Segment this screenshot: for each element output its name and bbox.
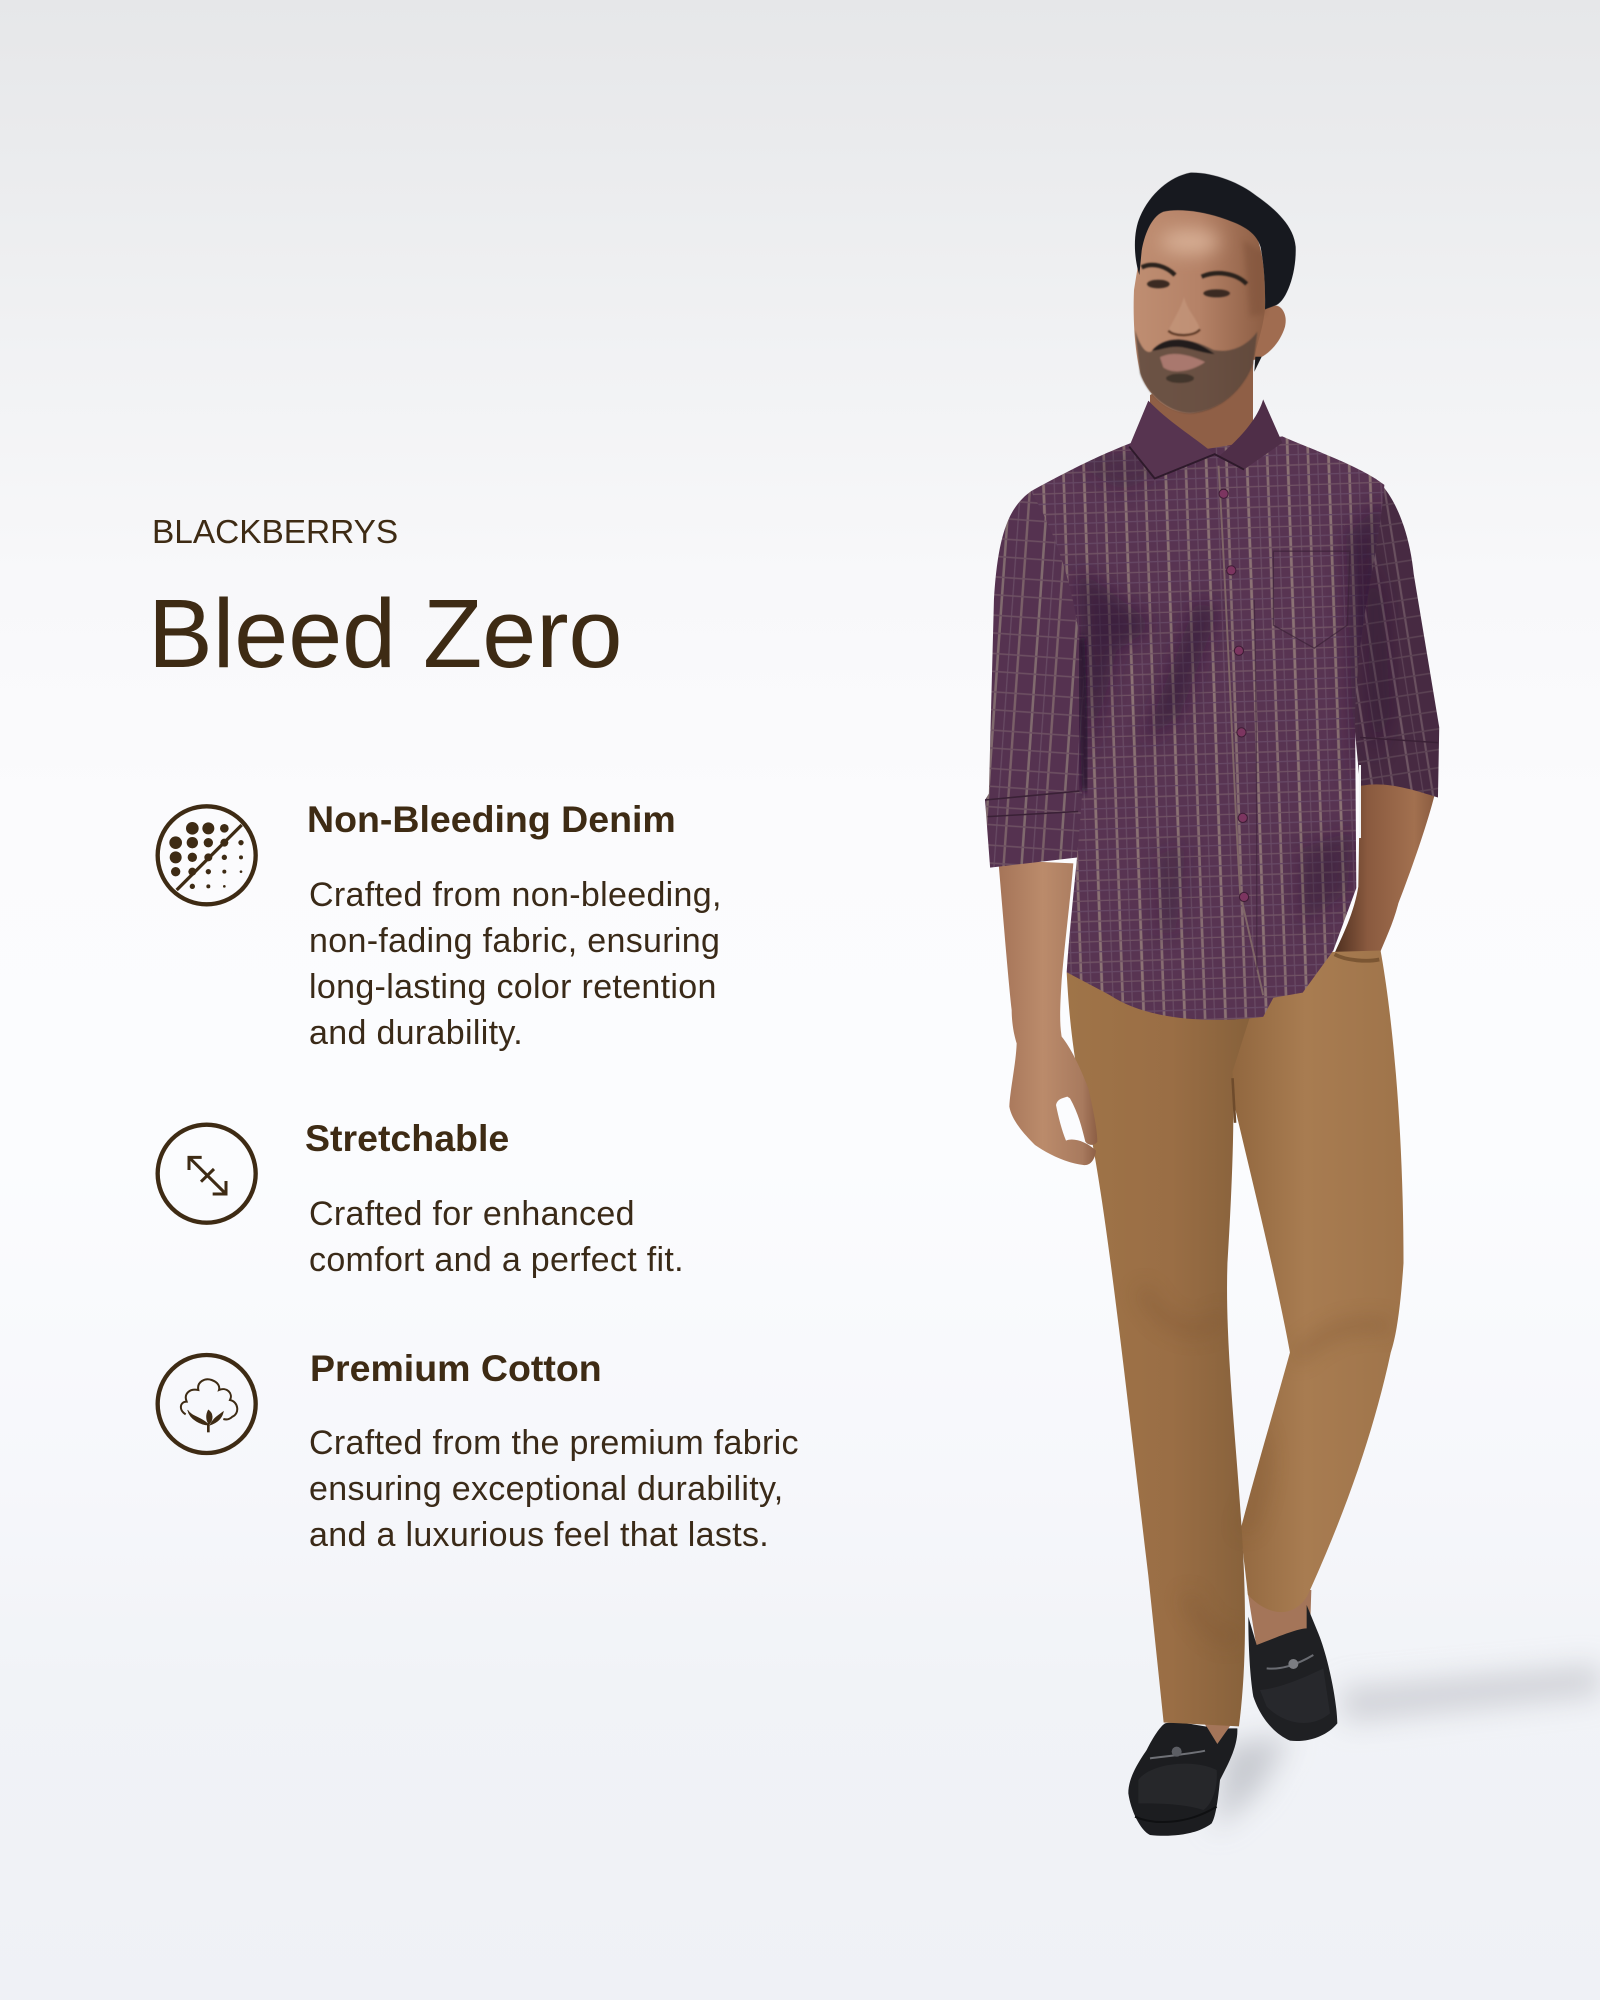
heading: Stretchable: [305, 1117, 509, 1159]
forehead highlight: [1160, 228, 1220, 255]
icon: fading dots: [158, 806, 256, 904]
description: non-fading fabric, ensuring: [309, 922, 720, 960]
collar: [1129, 401, 1215, 478]
description: Crafted for enhanced: [309, 1195, 635, 1233]
feature: non-bleeding denim: [158, 798, 722, 1052]
feature: premium cotton: [158, 1347, 799, 1554]
title: Bleed Zero: [148, 579, 622, 688]
neck: [1150, 340, 1258, 470]
nose: [1168, 297, 1200, 335]
shirt sleeve: right: [1346, 478, 1439, 797]
model photo: man in plum check shirt and tan chinos: [985, 173, 1600, 1836]
description: [309, 876, 722, 1052]
description: Crafted from non-bleeding,: [309, 876, 722, 914]
left forearm and hand: [998, 860, 1097, 1165]
description: [309, 1424, 799, 1554]
description: Crafted from the premium fabric: [309, 1424, 799, 1462]
front shoe: [1128, 1723, 1237, 1836]
hair behind ear: [1254, 357, 1262, 372]
description: comfort and a perfect fit.: [309, 1241, 684, 1279]
shirt: [985, 399, 1439, 1020]
icon: cotton boll: [158, 1355, 256, 1453]
shirt body: [1031, 436, 1384, 1020]
moustache: [1152, 340, 1215, 354]
rear shoe: [1248, 1605, 1337, 1741]
cheek shadow: [1243, 240, 1265, 317]
feature: stretchable: [158, 1117, 684, 1279]
beard stubble: [1135, 330, 1257, 413]
waist and pocket lines: [1233, 1078, 1235, 1123]
inner sleeve shadow: [1081, 638, 1086, 791]
trouser folds: [1242, 1326, 1358, 1522]
face: [1134, 209, 1265, 413]
gap between shirt and right arm: [1359, 765, 1361, 838]
description: [309, 1195, 684, 1279]
face features: [1135, 265, 1257, 413]
description: ensuring exceptional durability,: [309, 1470, 784, 1508]
shirt sleeve: left: [985, 491, 1085, 868]
icon: stretch arrows: [158, 1125, 256, 1223]
trouser leg: rear: [1225, 951, 1404, 1612]
sleeve shading: right: [1365, 549, 1391, 766]
description: and a luxurious feel that lasts.: [309, 1516, 769, 1554]
ankle skin: front foot: [1203, 1722, 1232, 1745]
heading: Premium Cotton: [310, 1347, 602, 1389]
feet: [1128, 1590, 1337, 1836]
hair: [1135, 173, 1296, 309]
description: and durability.: [309, 1014, 523, 1052]
buttons: [1219, 489, 1249, 902]
trouser leg: front: [1067, 972, 1257, 1726]
pocket: [1273, 551, 1350, 648]
brand label: BLACKBERRYS: [152, 514, 398, 551]
lips: [1160, 354, 1205, 371]
floor shadows: [1215, 1665, 1600, 1830]
shirt fold shading: [1065, 440, 1384, 938]
placket: [1219, 466, 1263, 995]
right forearm: [1332, 777, 1435, 960]
heading: Non-Bleeding Denim: [307, 798, 676, 840]
ear: [1253, 306, 1286, 360]
eyes: [1147, 280, 1170, 288]
trousers: [1067, 951, 1404, 1726]
ankle skin: rear foot: [1247, 1590, 1311, 1648]
head: [1134, 173, 1296, 413]
cuff lines: [985, 791, 1079, 817]
description: long-lasting color retention: [309, 968, 717, 1006]
brows: [1142, 265, 1247, 284]
